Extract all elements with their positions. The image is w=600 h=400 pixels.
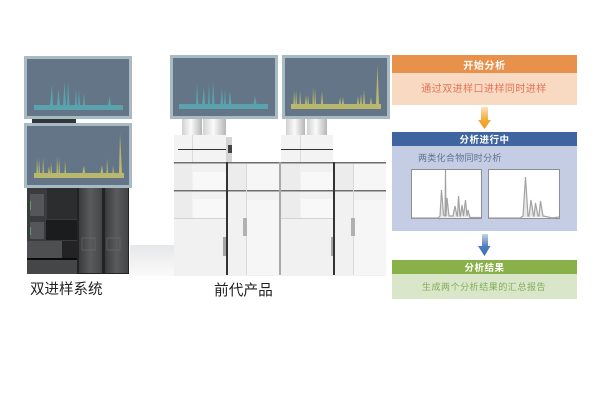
panel: start analysis: 通过双进样口进样同时进样 <box>421 82 547 95</box>
instrument: previous generation, left stack <box>174 119 279 276</box>
label: previous generation: 前代产品 <box>214 282 273 299</box>
panel: analysis results: 分析结果 <box>464 262 505 274</box>
panel: analysis in progress: 分析进行中 <box>459 134 510 146</box>
chart: left chromatogram <box>412 170 482 218</box>
label: dual injection system: 双进样系统 <box>30 281 102 298</box>
arrow: orange down <box>478 107 491 129</box>
panel: analysis results: 生成两个分析结果的汇总报告 <box>422 281 546 292</box>
panel: analysis results <box>392 260 577 299</box>
panel: start analysis <box>392 55 577 105</box>
monitor: previous generation teal chromatogram <box>170 55 278 119</box>
monitor: previous generation yellow chromatogram <box>282 55 390 119</box>
chart: right chromatogram <box>488 170 560 218</box>
monitor: dual system teal chromatogram <box>24 56 132 119</box>
arrow: blue down <box>478 234 490 256</box>
instrument: dual injection system <box>27 119 129 274</box>
monitor: dual system yellow chromatogram <box>24 123 132 188</box>
panel: analysis in progress: 两类化合物同时分析 <box>418 152 502 163</box>
panel: start analysis: 开始分析 <box>463 59 506 72</box>
panel: analysis in progress <box>392 132 577 231</box>
instrument: previous generation, right stack <box>279 119 386 276</box>
floor shadow <box>130 245 175 276</box>
